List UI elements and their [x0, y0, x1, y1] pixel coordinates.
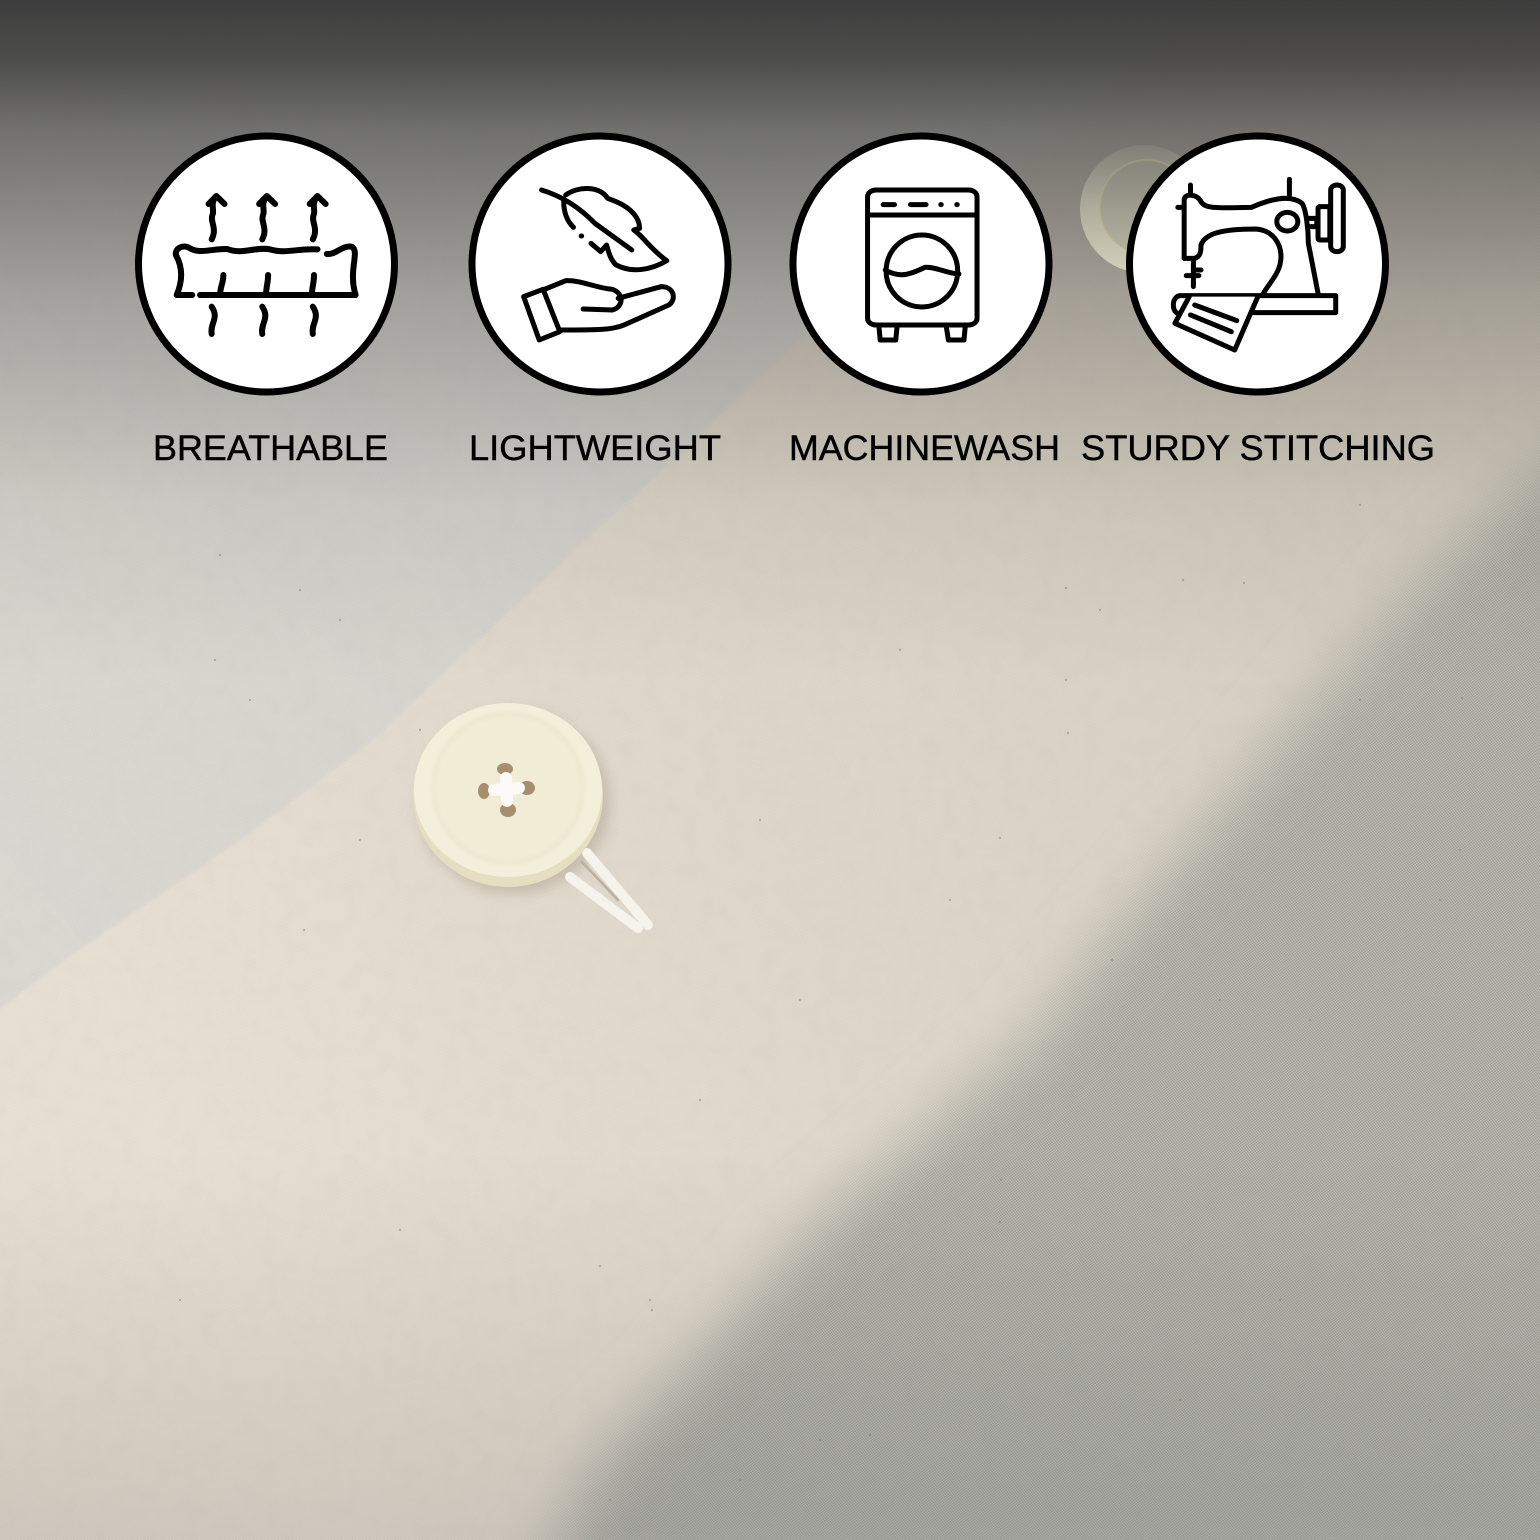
label: lightweight: LIGHTWEIGHT	[469, 429, 721, 468]
icon: breathable fabric	[176, 196, 356, 334]
feature: machine wash	[789, 136, 1060, 468]
shadow: lower edge of vignette	[0, 1150, 1540, 1540]
buttonhole	[570, 853, 648, 928]
icon: feather over hand	[524, 189, 673, 340]
feature: breathable	[138, 136, 394, 468]
label: sturdy stitching: STURDY STITCHING	[1081, 429, 1435, 468]
feature: lightweight	[469, 136, 728, 468]
icon: sewing machine	[1173, 179, 1343, 350]
circle badge: machine wash	[793, 136, 1049, 392]
circle badge: breathable	[138, 136, 394, 392]
label: machine wash: MACHINEWASH	[789, 429, 1060, 468]
icon: washing machine	[868, 190, 977, 340]
feature: sturdy stitching	[1081, 136, 1435, 468]
circle badge: sturdy stitching	[1130, 136, 1386, 392]
circle badge: lightweight	[472, 136, 728, 392]
main button	[413, 703, 648, 928]
label: breathable: BREATHABLE	[153, 429, 388, 468]
upper button	[1080, 145, 1208, 273]
